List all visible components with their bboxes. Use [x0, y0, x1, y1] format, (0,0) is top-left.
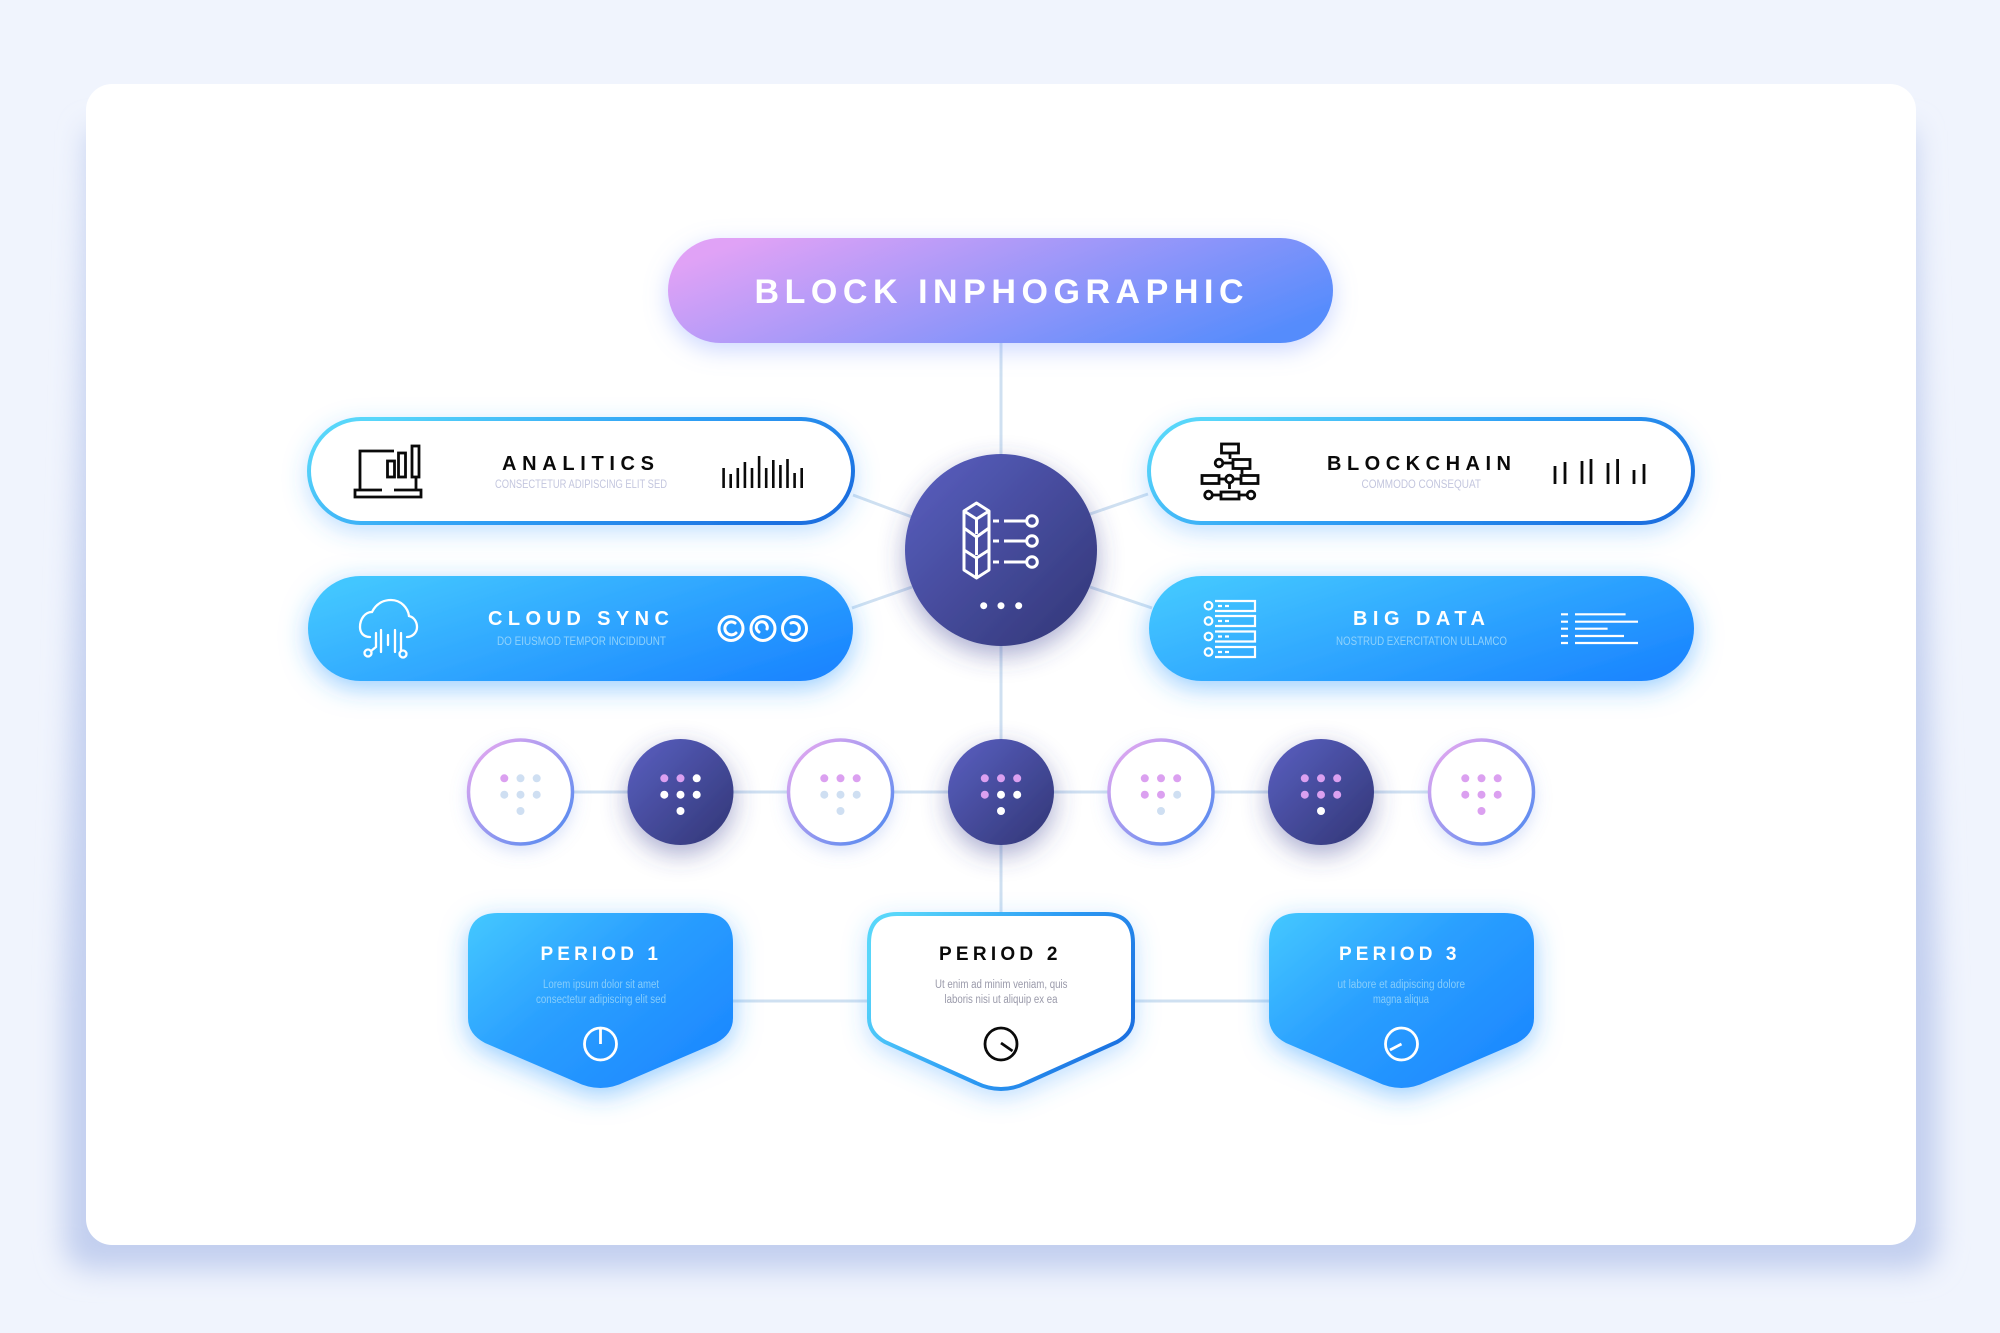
- icon: clock 1: [584, 1028, 616, 1060]
- three dots: [980, 602, 1022, 609]
- icon: cloud: [360, 600, 417, 658]
- heading: blockchain: BLOCKCHAIN: [1327, 453, 1511, 475]
- connector lines: [520, 343, 1481, 1001]
- central hub circle: [905, 454, 1097, 646]
- icon: text lines: [1561, 614, 1638, 643]
- body: period 3: ut labore et adipiscing dolore: [1338, 979, 1465, 991]
- icon: laptop with bars: [355, 446, 421, 497]
- body: period 2: laboris nisi ut aliquip ex ea: [944, 994, 1058, 1006]
- panel: cloud sync: [308, 576, 853, 681]
- heading: analitics: ANALITICS: [502, 453, 654, 475]
- heading: period 2: PERIOD 2: [939, 944, 1058, 965]
- subtitle: analitics: CONSECTETUR ADIPISCING ELIT SED: [495, 479, 667, 491]
- heading: period 3: PERIOD 3: [1339, 944, 1456, 965]
- white card panel: [86, 84, 1916, 1245]
- body: period 3: magna aliqua: [1373, 994, 1429, 1006]
- subtitle: cloud sync: DO EIUSMOD TEMPOR INCIDIDUNT: [497, 636, 666, 648]
- heading: period 1: PERIOD 1: [540, 944, 658, 965]
- icon: equalizer bars: [724, 456, 802, 488]
- subtitle: big data: NOSTRUD EXERCITATION ULLAMCO: [1336, 636, 1507, 648]
- panel: big data: [1149, 576, 1694, 681]
- body: period 1: Lorem ipsum dolor sit amet: [543, 979, 660, 991]
- icon: three coils: [719, 616, 806, 640]
- step circle 1: [468, 740, 572, 844]
- panel: analitics: [309, 419, 853, 523]
- icon: server list: [1205, 601, 1255, 657]
- body: period 1: [536, 979, 666, 1006]
- step circle 3: [788, 740, 892, 844]
- body: period 2: Ut enim ad minim veniam, quis: [935, 979, 1068, 991]
- body: period 2: [935, 979, 1068, 1006]
- step circle 6: [1268, 739, 1374, 845]
- icon: clock 3: [1386, 1028, 1418, 1060]
- panel: period 2: [869, 914, 1133, 1089]
- icon: block column with nodes: [964, 503, 1037, 578]
- icon: flowchart: [1202, 444, 1258, 499]
- step circle 5: [1109, 740, 1213, 844]
- body: period 1: consectetur adipiscing elit sed: [536, 994, 666, 1006]
- panel: period 1: [468, 913, 733, 1088]
- panel: period 3: [1269, 913, 1534, 1088]
- heading: big data: BIG DATA: [1353, 608, 1485, 630]
- title text: BLOCK INPHOGRAPHIC: [754, 273, 1244, 311]
- title pill: [668, 238, 1333, 343]
- step circle 4: [948, 739, 1054, 845]
- step circle 7: [1430, 740, 1534, 844]
- body: period 3: [1338, 979, 1465, 1006]
- subtitle: blockchain: COMMODO CONSEQUAT: [1362, 479, 1481, 491]
- panel: blockchain: [1149, 419, 1693, 523]
- step circle 2: [628, 739, 734, 845]
- icon: paired bars: [1555, 459, 1644, 484]
- icon: clock 2: [985, 1028, 1017, 1060]
- heading: cloud sync: CLOUD SYNC: [488, 608, 669, 630]
